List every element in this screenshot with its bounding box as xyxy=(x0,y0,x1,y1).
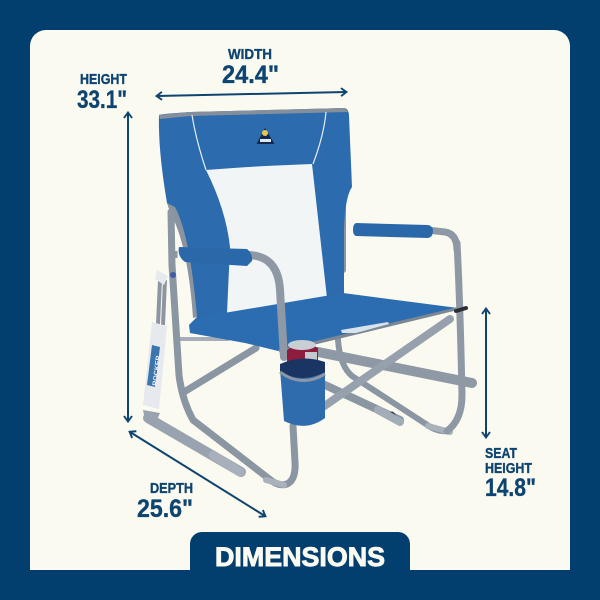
seat height label xyxy=(485,445,536,502)
width label xyxy=(222,46,279,89)
seat xyxy=(189,293,458,351)
height arrow xyxy=(127,113,129,421)
height label xyxy=(77,71,127,114)
title: DIMENSIONS xyxy=(215,542,385,572)
rear frame xyxy=(176,185,450,432)
logo xyxy=(257,128,274,144)
depth label: DEPTH xyxy=(150,480,193,497)
back panel xyxy=(159,108,352,320)
width label: 24.4" xyxy=(222,61,279,89)
seat latch xyxy=(456,308,466,311)
seat edge xyxy=(278,307,458,353)
height label: HEIGHT xyxy=(80,71,127,88)
depth label xyxy=(137,480,193,523)
front frame xyxy=(148,212,472,485)
seat label xyxy=(341,322,389,333)
seat height label: HEIGHT xyxy=(485,460,532,477)
shock label: ROCKER xyxy=(152,355,163,386)
mesh panel xyxy=(206,164,327,313)
seat height label: SEAT xyxy=(485,445,517,462)
depth arrow xyxy=(130,432,265,516)
can xyxy=(287,340,318,365)
width arrow xyxy=(157,92,346,96)
side edge xyxy=(167,203,197,318)
depth label: 25.6" xyxy=(137,495,193,523)
seat height label: 14.8" xyxy=(485,474,536,502)
left armrest pad xyxy=(179,247,252,266)
right armrest pad xyxy=(353,223,433,238)
title tab xyxy=(190,532,410,572)
piping xyxy=(192,112,326,170)
height label: 33.1" xyxy=(77,86,127,114)
cup holder xyxy=(280,358,325,426)
shock absorber xyxy=(143,270,176,420)
back top edge xyxy=(159,108,348,119)
width label: WIDTH xyxy=(228,46,272,63)
chair xyxy=(143,108,472,485)
seat height arrow xyxy=(485,309,487,437)
